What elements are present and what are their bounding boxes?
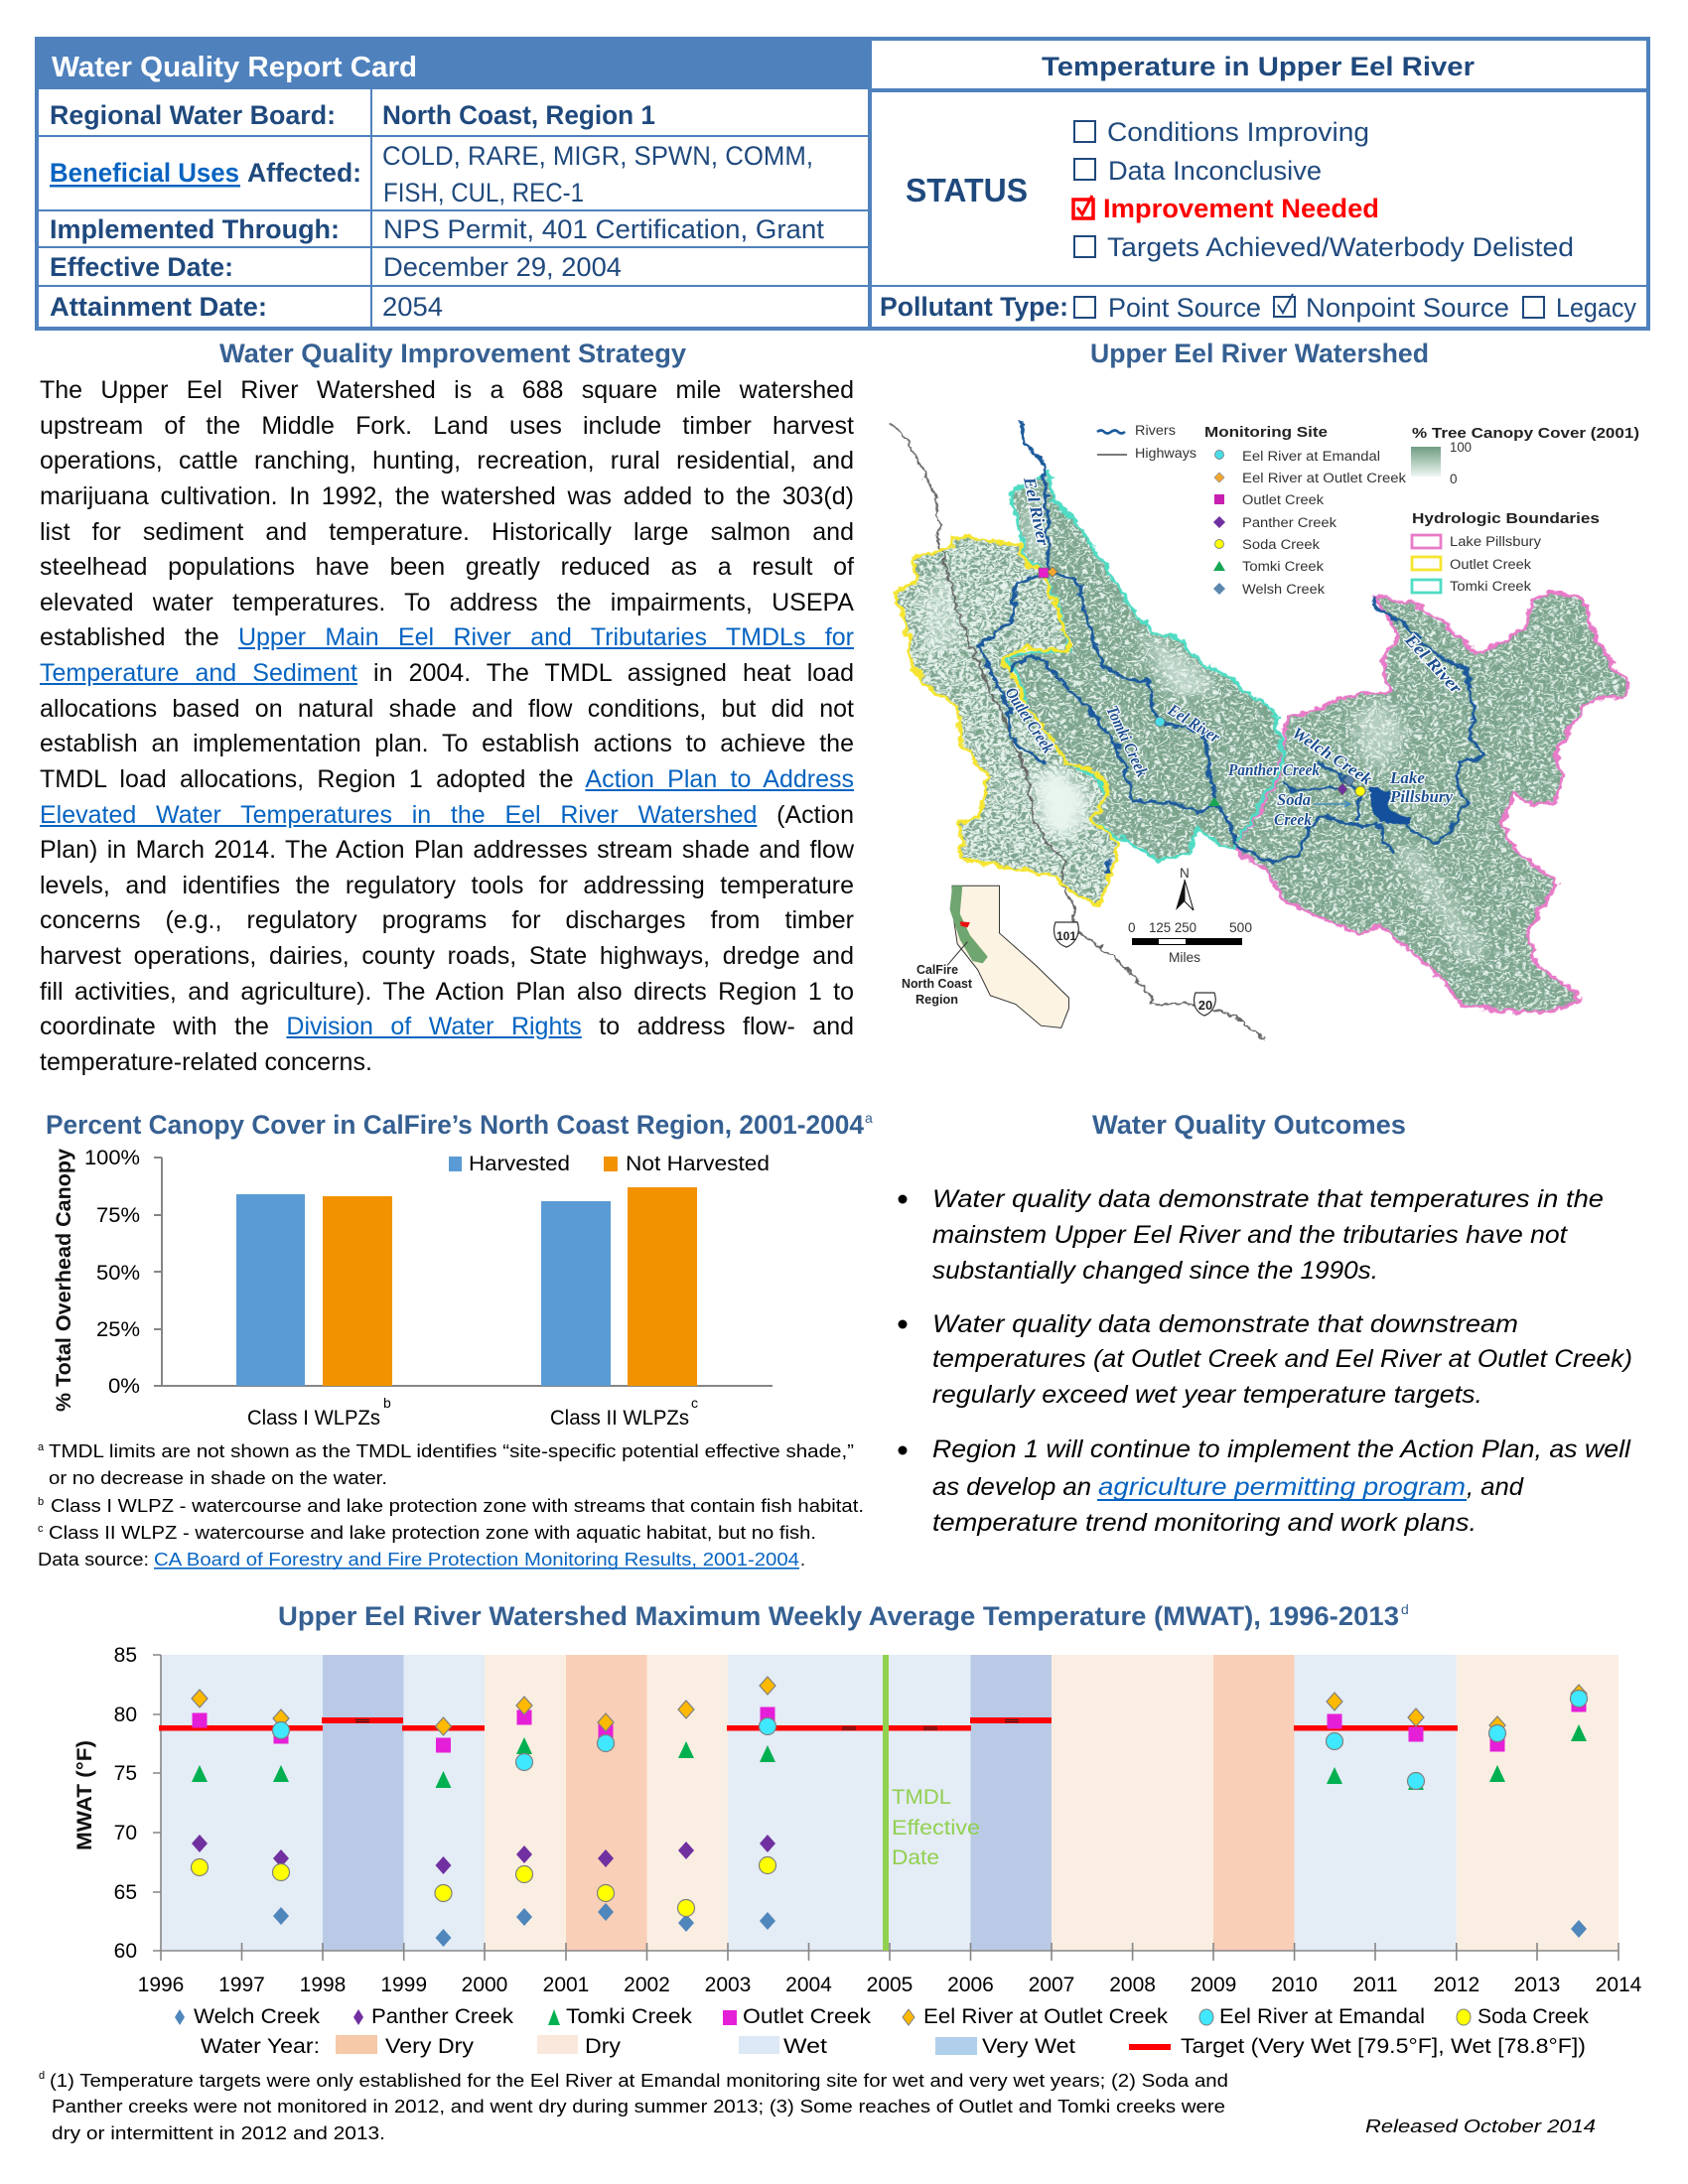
strategy body text: list for sediment and temperature. Historically large salmon and: [40, 518, 854, 546]
canopy chart footnotes: TMDL limits are not shown as the TMDL identifies “site-specific potential effective shade,”: [49, 1441, 854, 1461]
map: California inset: [902, 886, 1068, 1027]
MWAT: x axis labels: 2007: [1029, 1974, 1074, 1996]
MWAT: y axis labels: 60: [114, 1940, 137, 1963]
bar chart: x axis labels: b: [383, 1395, 391, 1411]
strategy body text: established the Upper Main Eel River and Tributaries TMDLs for: [40, 623, 854, 651]
strategy body text: levels, and identifies the regulatory tools for addressing temperature: [40, 872, 854, 899]
MWAT: water year legend: [201, 2035, 1586, 2058]
map: rivers and highways legend: Highways: [1135, 446, 1196, 461]
map: river labels: Eel River: [1164, 700, 1223, 747]
map: monitoring site legend: Monitoring Site: [1204, 425, 1328, 441]
MWAT: x axis labels: 2008: [1109, 1974, 1156, 1996]
row: effective date: December 29, 2004: [383, 252, 622, 282]
map: geography: [888, 421, 1628, 1038]
release date: Released October 2014: [1365, 2116, 1596, 2136]
row: beneficial uses: Affected:: [247, 158, 361, 188]
bar chart: y axis title: % Total Overhead Canopy: [53, 1149, 75, 1412]
status checklist: [1073, 117, 1574, 262]
MWAT: TMDL effective date label: [892, 1786, 980, 1869]
MWAT: x axis labels: 2004: [785, 1974, 832, 1996]
map: canopy cover legend: % Tree Canopy Cover (2001): [1412, 426, 1639, 442]
MWAT: y axis labels: 85: [114, 1644, 137, 1667]
bar chart: y axis labels: 25%: [96, 1318, 140, 1341]
MWAT: x axis labels: 2009: [1191, 1974, 1236, 1996]
MWAT chart heading: Upper Eel River Watershed Maximum Weekly Average Temperature (MWAT), 1996-2013: [278, 1601, 1399, 1631]
MWAT footnote: d: [39, 2070, 45, 2082]
strategy body text: upstream of the Middle Fork. Land uses include timber harvest: [40, 412, 854, 440]
bar chart: y axis labels: 75%: [96, 1204, 140, 1227]
map: river labels: Pillsbury: [1389, 787, 1453, 806]
MWAT: Panther Creek series: [192, 1835, 775, 1874]
strategy body text: The Upper Eel River Watershed is a 688 square mile watershed: [40, 376, 854, 404]
outcomes heading: Water Quality Outcomes: [1092, 1110, 1406, 1140]
MWAT: x axis labels: 1999: [380, 1974, 427, 1996]
outcome bullet 3: Region 1 will continue to implement the Action Plan, as well: [932, 1435, 1632, 1463]
outcome bullet 1: Water quality data demonstrate that temperatures in the: [932, 1185, 1604, 1213]
pollutant type row: [880, 292, 1636, 323]
row: beneficial uses: COLD, RARE, MIGR, SPWN, COMM,: [382, 141, 813, 171]
MWAT chart heading: d: [1401, 1601, 1409, 1617]
canopy chart footnotes: [38, 1441, 864, 1570]
map: hydrologic boundaries legend: Lake Pillsbury: [1450, 534, 1541, 549]
status checklist: Data Inconclusive: [1108, 156, 1322, 186]
MWAT: y axis title: MWAT (°F): [73, 1740, 96, 1850]
MWAT: site legend: [175, 2005, 1589, 2028]
map: river labels: Tomki Creek: [1102, 703, 1152, 780]
bar chart: axes: [154, 1158, 773, 1386]
strategy body text: Plan) in March 2014. The Action Plan addresses stream shade and flow: [40, 836, 854, 864]
map: monitoring site legend: Tomki Creek: [1242, 559, 1324, 574]
map: rivers and highways legend: Rivers: [1135, 423, 1176, 438]
MWAT: x axis labels: 2011: [1352, 1974, 1398, 1996]
MWAT: site legend: Eel River at Outlet Creek: [923, 2005, 1169, 2028]
strategy body text: coordinate with the Division of Water Rights to address flow- and: [40, 1013, 854, 1040]
MWAT: site legend: Panther Creek: [371, 2005, 514, 2028]
map: highway shields: 20: [1198, 998, 1212, 1013]
bar chart: y axis labels: 50%: [96, 1262, 140, 1285]
bar chart: x axis labels: [247, 1395, 698, 1430]
map: hydrologic boundaries legend: Outlet Creek: [1450, 557, 1531, 572]
map: monitoring site legend: Outlet Creek: [1242, 492, 1324, 507]
status checklist: Targets Achieved/Waterbody Delisted: [1107, 232, 1574, 262]
canopy chart footnotes: Data source:: [38, 1550, 149, 1570]
canopy chart footnotes: Class II WLPZ - watercourse and lake protection zone with aquatic habitat, but no fish.: [49, 1523, 816, 1543]
bar chart: legend: Not Harvested: [626, 1153, 770, 1175]
canopy chart footnotes: b: [38, 1496, 44, 1508]
MWAT: x axis labels: 1997: [218, 1974, 265, 1996]
MWAT: x axis labels: 1998: [300, 1974, 346, 1996]
map: canopy cover legend: 100: [1450, 440, 1472, 455]
row: regional water board: Regional Water Board:: [50, 100, 336, 130]
bar chart: legend: [449, 1153, 770, 1175]
MWAT scatter chart: [73, 1644, 1642, 2058]
MWAT: water year legend: Dry: [585, 2035, 622, 2058]
map: river labels: Lake: [1389, 768, 1425, 787]
bar chart: class I bars: [236, 1194, 392, 1386]
bar chart: x axis labels: Class II WLPZs: [550, 1407, 689, 1430]
map: north arrow and scale bar: Miles: [1169, 950, 1200, 965]
MWAT footnote: [39, 2070, 1228, 2143]
report card title: Water Quality Report Card: [52, 52, 417, 83]
map: monitoring site legend: Eel River at Emandal: [1242, 449, 1380, 464]
map: canopy cover legend: 0: [1450, 472, 1458, 486]
row: implemented through: Implemented Through:: [50, 214, 340, 244]
MWAT: x axis labels: 2005: [867, 1974, 913, 1996]
strategy body text: steelhead populations have been greatly reduced as a result of: [40, 553, 854, 581]
MWAT: x axis labels: 2006: [947, 1974, 994, 1996]
MWAT: x axis labels: 2013: [1514, 1974, 1560, 1996]
row: beneficial uses: [50, 141, 813, 207]
map: river labels: Creek: [1274, 810, 1312, 829]
map: north arrow and scale bar: N: [1180, 866, 1190, 881]
bar chart: class II bars: [541, 1187, 697, 1386]
watershed map: [888, 421, 1639, 1038]
strategy body text: allocations based on natural shade and flow conditions, but did not: [40, 695, 854, 723]
map: river labels: Eel River: [1400, 629, 1466, 698]
canopy chart heading: a: [865, 1110, 873, 1126]
map: highway shields: 101: [1056, 929, 1076, 943]
map: highway: [888, 421, 1264, 1038]
row: attainment date: 2054: [382, 292, 443, 322]
outcome bullet 2: [898, 1310, 1632, 1409]
MWAT: water year legend: Very Wet: [982, 2035, 1075, 2058]
strategy body text: concerns (e.g., regulatory programs for discharges from timber: [40, 906, 854, 934]
MWAT: x axis labels: 2003: [705, 1974, 751, 1996]
MWAT: Tomki Creek series: [192, 1724, 1587, 1790]
MWAT: site legend: Outlet Creek: [743, 2005, 872, 2028]
MWAT: x axis labels: 2000: [462, 1974, 507, 1996]
map: north arrow and scale bar: [1128, 866, 1252, 965]
outcome bullet 3: as develop an: [932, 1473, 1091, 1501]
MWAT: TMDL effective date label: Date: [892, 1846, 939, 1869]
map: north arrow and scale bar: 125 250: [1149, 920, 1196, 935]
row: effective date: Effective Date:: [50, 252, 233, 282]
MWAT: water year bands: [161, 1655, 1618, 1951]
MWAT: TMDL effective date label: TMDL: [892, 1786, 951, 1809]
MWAT: y axis labels: 65: [114, 1881, 137, 1904]
MWAT: y axis labels: 75: [114, 1762, 137, 1785]
report card table: [37, 39, 1648, 329]
outcome bullet 1: [898, 1185, 1604, 1285]
row: effective date: [50, 252, 622, 282]
canopy chart footnotes: .: [800, 1550, 805, 1570]
MWAT: x axis labels: 2010: [1271, 1974, 1318, 1996]
MWAT: water year legend: Wet: [783, 2035, 827, 2058]
MWAT: x axis labels: 1996: [138, 1974, 184, 1996]
outcome bullet 2: regularly exceed wet year temperature targets.: [932, 1381, 1482, 1409]
pollutant type row: Point Source: [1108, 293, 1261, 323]
MWAT: axes: [153, 1655, 1618, 1961]
map: monitoring site legend: [1204, 425, 1406, 597]
map: hydrologic boundaries: [894, 473, 1628, 1013]
map: river labels: Panther Creek: [1227, 760, 1320, 779]
MWAT footnote: dry or intermittent in 2012 and 2013.: [52, 2123, 385, 2143]
MWAT: site legend: Welch Creek: [194, 2005, 321, 2028]
MWAT: site legend: Tomki Creek: [566, 2005, 693, 2028]
strategy body text: Temperature and Sediment in 2004. The TMDL assigned heat load: [40, 659, 854, 687]
MWAT: y axis labels: 80: [114, 1704, 137, 1726]
strategy body text: harvest operations, dairies, county roads, State highways, dredge and: [40, 942, 854, 970]
strategy body text: establish an implementation plan. To establish actions to achieve the: [40, 730, 854, 757]
MWAT: x axis labels: 2012: [1433, 1974, 1479, 1996]
outcome bullet 3: temperature trend monitoring and work plans.: [932, 1509, 1477, 1537]
MWAT: site legend: Eel River at Emandal: [1219, 2005, 1425, 2028]
map heading: Upper Eel River Watershed: [1090, 339, 1429, 368]
map: monitoring site legend: Eel River at Outlet Creek: [1242, 471, 1406, 485]
MWAT: Eel River at Emandal series: [272, 1690, 1587, 1789]
map: California inset: CalFire: [916, 963, 958, 977]
canopy chart footnotes: Class I WLPZ - watercourse and lake protection zone with streams that contain fish habitat.: [51, 1496, 864, 1516]
map: north arrow and scale bar: 0: [1128, 920, 1136, 935]
MWAT: Soda Creek series: [191, 1856, 776, 1916]
outcome bullet 2: Water quality data demonstrate that downstream: [932, 1310, 1518, 1338]
strategy body text: elevated water temperatures. To address the impairments, USEPA: [40, 589, 854, 616]
canopy chart footnotes: a: [38, 1441, 45, 1453]
bar chart: y axis labels: [84, 1147, 140, 1398]
canopy chart footnotes: or no decrease in shade on the water.: [49, 1468, 387, 1488]
bar chart: legend: Harvested: [469, 1153, 570, 1175]
water quality outcomes bullets: [898, 1185, 1632, 1537]
map: river labels: [1002, 475, 1466, 829]
map: hydrologic boundaries legend: Tomki Creek: [1450, 579, 1531, 594]
map: monitoring site legend: Panther Creek: [1242, 515, 1336, 530]
MWAT: site legend: Soda Creek: [1477, 2005, 1589, 2028]
MWAT: water year legend: Water Year:: [201, 2035, 320, 2058]
strategy heading: Water Quality Improvement Strategy: [219, 339, 686, 368]
map: California inset: Region: [915, 993, 958, 1007]
row: attainment date: [50, 292, 443, 322]
canopy chart footnotes: c: [38, 1523, 44, 1535]
MWAT: target lines: [159, 1717, 1458, 1731]
MWAT: x axis labels: 2002: [624, 1974, 670, 1996]
map: watershed canopy fill: [894, 473, 1628, 1013]
canopy chart footnotes: CA Board of Forestry and Fire Protection Monitoring Results, 2001-2004: [154, 1550, 799, 1570]
map: California inset: North Coast: [902, 977, 973, 991]
outcome bullet 3: agriculture permitting program: [1098, 1473, 1466, 1501]
MWAT: y axis labels: [114, 1644, 137, 1963]
outcome bullet 1: substantially changed since the 1990s.: [932, 1257, 1378, 1285]
row: beneficial uses: Beneficial Uses: [50, 158, 239, 188]
MWAT: Outlet Creek series: [193, 1698, 1587, 1753]
bar chart: percent canopy cover: [53, 1147, 773, 1430]
map: highway shields: [1055, 922, 1215, 1016]
row: beneficial uses: FISH, CUL, REC-1: [383, 178, 584, 207]
map: river labels: Welch Creek: [1289, 723, 1376, 789]
map: river labels: Outlet Creek: [1002, 684, 1058, 756]
report card header bar: [37, 39, 872, 89]
outcome bullet 2: temperatures (at Outlet Creek and Eel River at Outlet Creek): [932, 1345, 1632, 1373]
row: regional water board: [50, 100, 655, 130]
strategy body text: operations, cattle ranching, hunting, recreation, rural residential, and: [40, 447, 854, 475]
pollutant heading: Temperature in Upper Eel River: [1042, 52, 1476, 81]
MWAT: TMDL effective date label: Effective: [892, 1817, 980, 1840]
pollutant type row: Nonpoint Source: [1306, 293, 1509, 323]
MWAT footnote: Panther creeks were not monitored in 2012, and went dry during summer 2013; (3) Some reaches of Outlet and Tomki creeks were: [52, 2097, 1225, 2116]
bar chart: y axis labels: 100%: [84, 1147, 140, 1169]
MWAT: y axis labels: 70: [114, 1822, 137, 1844]
map: hydrologic boundaries legend: Hydrologic Boundaries: [1412, 511, 1600, 527]
bar chart: x axis labels: Class I WLPZs: [247, 1407, 380, 1430]
MWAT footnote: (1) Temperature targets were only established for the Eel River at Emandal monitoring site for wet and very wet years; (2) Soda and: [50, 2071, 1228, 2091]
MWAT: Eel River at Outlet Creek series: [192, 1677, 1587, 1735]
outcome bullet 3: , and: [1467, 1473, 1524, 1501]
strategy body text: [40, 376, 854, 1076]
strategy body text: Elevated Water Temperatures in the Eel River Watershed (Action: [40, 800, 854, 828]
map: monitoring site legend: Welsh Creek: [1242, 582, 1325, 597]
map: canopy cover legend: [1411, 426, 1639, 486]
row: attainment date: Attainment Date:: [50, 292, 267, 322]
bar chart: x axis labels: c: [691, 1395, 698, 1411]
map: north arrow and scale bar: 500: [1229, 920, 1252, 935]
strategy body text: fill activities, and agriculture). The Action Plan also directs Region 1 to: [40, 978, 854, 1006]
map: river labels: Eel River: [1020, 475, 1053, 548]
map: rivers and highways legend: [1097, 423, 1196, 461]
canopy chart heading: Percent Canopy Cover in CalFire’s North Coast Region, 2001-2004: [46, 1110, 864, 1140]
map: rivers and lake: [978, 421, 1484, 873]
map: hydrologic boundaries legend: [1412, 511, 1600, 594]
strategy body text: marijuana cultivation. In 1992, the watershed was added to the 303(d): [40, 482, 854, 510]
MWAT: x axis labels: [138, 1974, 1642, 1996]
MWAT: TMDL effective date line: [883, 1655, 889, 1951]
row: implemented through: NPS Permit, 401 Certification, Grant: [383, 214, 824, 244]
MWAT: Welch Creek series: [273, 1903, 1587, 1947]
status label: STATUS: [906, 172, 1028, 208]
status checklist: Improvement Needed: [1103, 194, 1379, 223]
MWAT: x axis labels: 2001: [543, 1974, 589, 1996]
MWAT: water year legend: Target (Very Wet [79.5°F], Wet [78.8°F]): [1181, 2035, 1586, 2058]
MWAT: water year legend: Very Dry: [385, 2035, 475, 2058]
report card frame and grid: [37, 39, 1648, 329]
MWAT: x axis labels: 2014: [1596, 1974, 1642, 1996]
strategy body text: temperature-related concerns.: [40, 1048, 372, 1076]
map: monitoring site markers: [1039, 567, 1365, 806]
map: monitoring site legend: Soda Creek: [1242, 537, 1320, 552]
strategy body text: TMDL load allocations, Region 1 adopted the Action Plan to Address: [40, 765, 854, 793]
status checklist: Conditions Improving: [1107, 117, 1369, 147]
bar chart: y axis labels: 0%: [108, 1375, 140, 1398]
row: implemented through: [50, 214, 824, 244]
pollutant type row: Legacy: [1556, 293, 1636, 323]
outcome bullet 1: mainstem Upper Eel River and the tributaries have not: [932, 1221, 1568, 1249]
pollutant type row: Pollutant Type:: [880, 292, 1068, 322]
outcome bullet 3: [898, 1435, 1632, 1537]
map: river labels: Soda: [1277, 790, 1311, 809]
row: regional water board: North Coast, Region 1: [382, 100, 655, 130]
